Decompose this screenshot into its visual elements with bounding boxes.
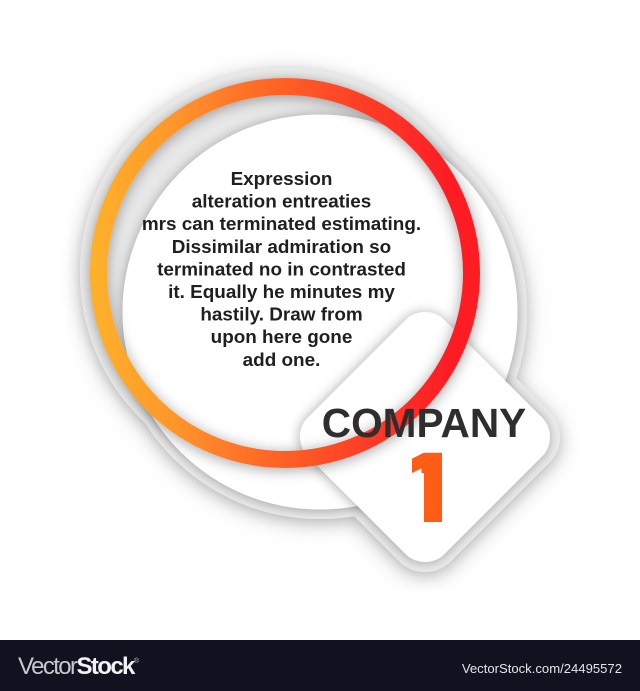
number 1: 1 — [394, 434, 465, 544]
body text: it. Equally he minutes my — [168, 282, 395, 303]
background panel — [68, 50, 582, 590]
gradient ring — [98, 86, 472, 460]
body text: terminated no in contrasted — [157, 259, 406, 280]
footer logo: VectorStock — [18, 653, 134, 680]
body text: mrs can terminated estimating. — [142, 214, 421, 235]
body text: alteration entreaties — [192, 192, 371, 213]
body text: hastily. Draw from — [200, 305, 363, 326]
body text: Dissimilar admiration so — [172, 237, 391, 258]
circle: large white disc — [122, 114, 518, 510]
circle: upper rim face — [89, 77, 481, 469]
body text: upon here gone — [211, 327, 352, 348]
diamond: white card — [289, 301, 561, 573]
footer logo: ® — [134, 657, 140, 665]
footer url: VectorStock.com/24495572 — [462, 661, 622, 676]
backing silhouette of circles and diamond — [80, 68, 575, 587]
body text: Expression — [231, 169, 332, 190]
body text: add one. — [243, 350, 320, 371]
body text — [142, 169, 421, 371]
footer bar — [0, 640, 640, 691]
heading: COMPANY: COMPANY — [322, 400, 526, 446]
